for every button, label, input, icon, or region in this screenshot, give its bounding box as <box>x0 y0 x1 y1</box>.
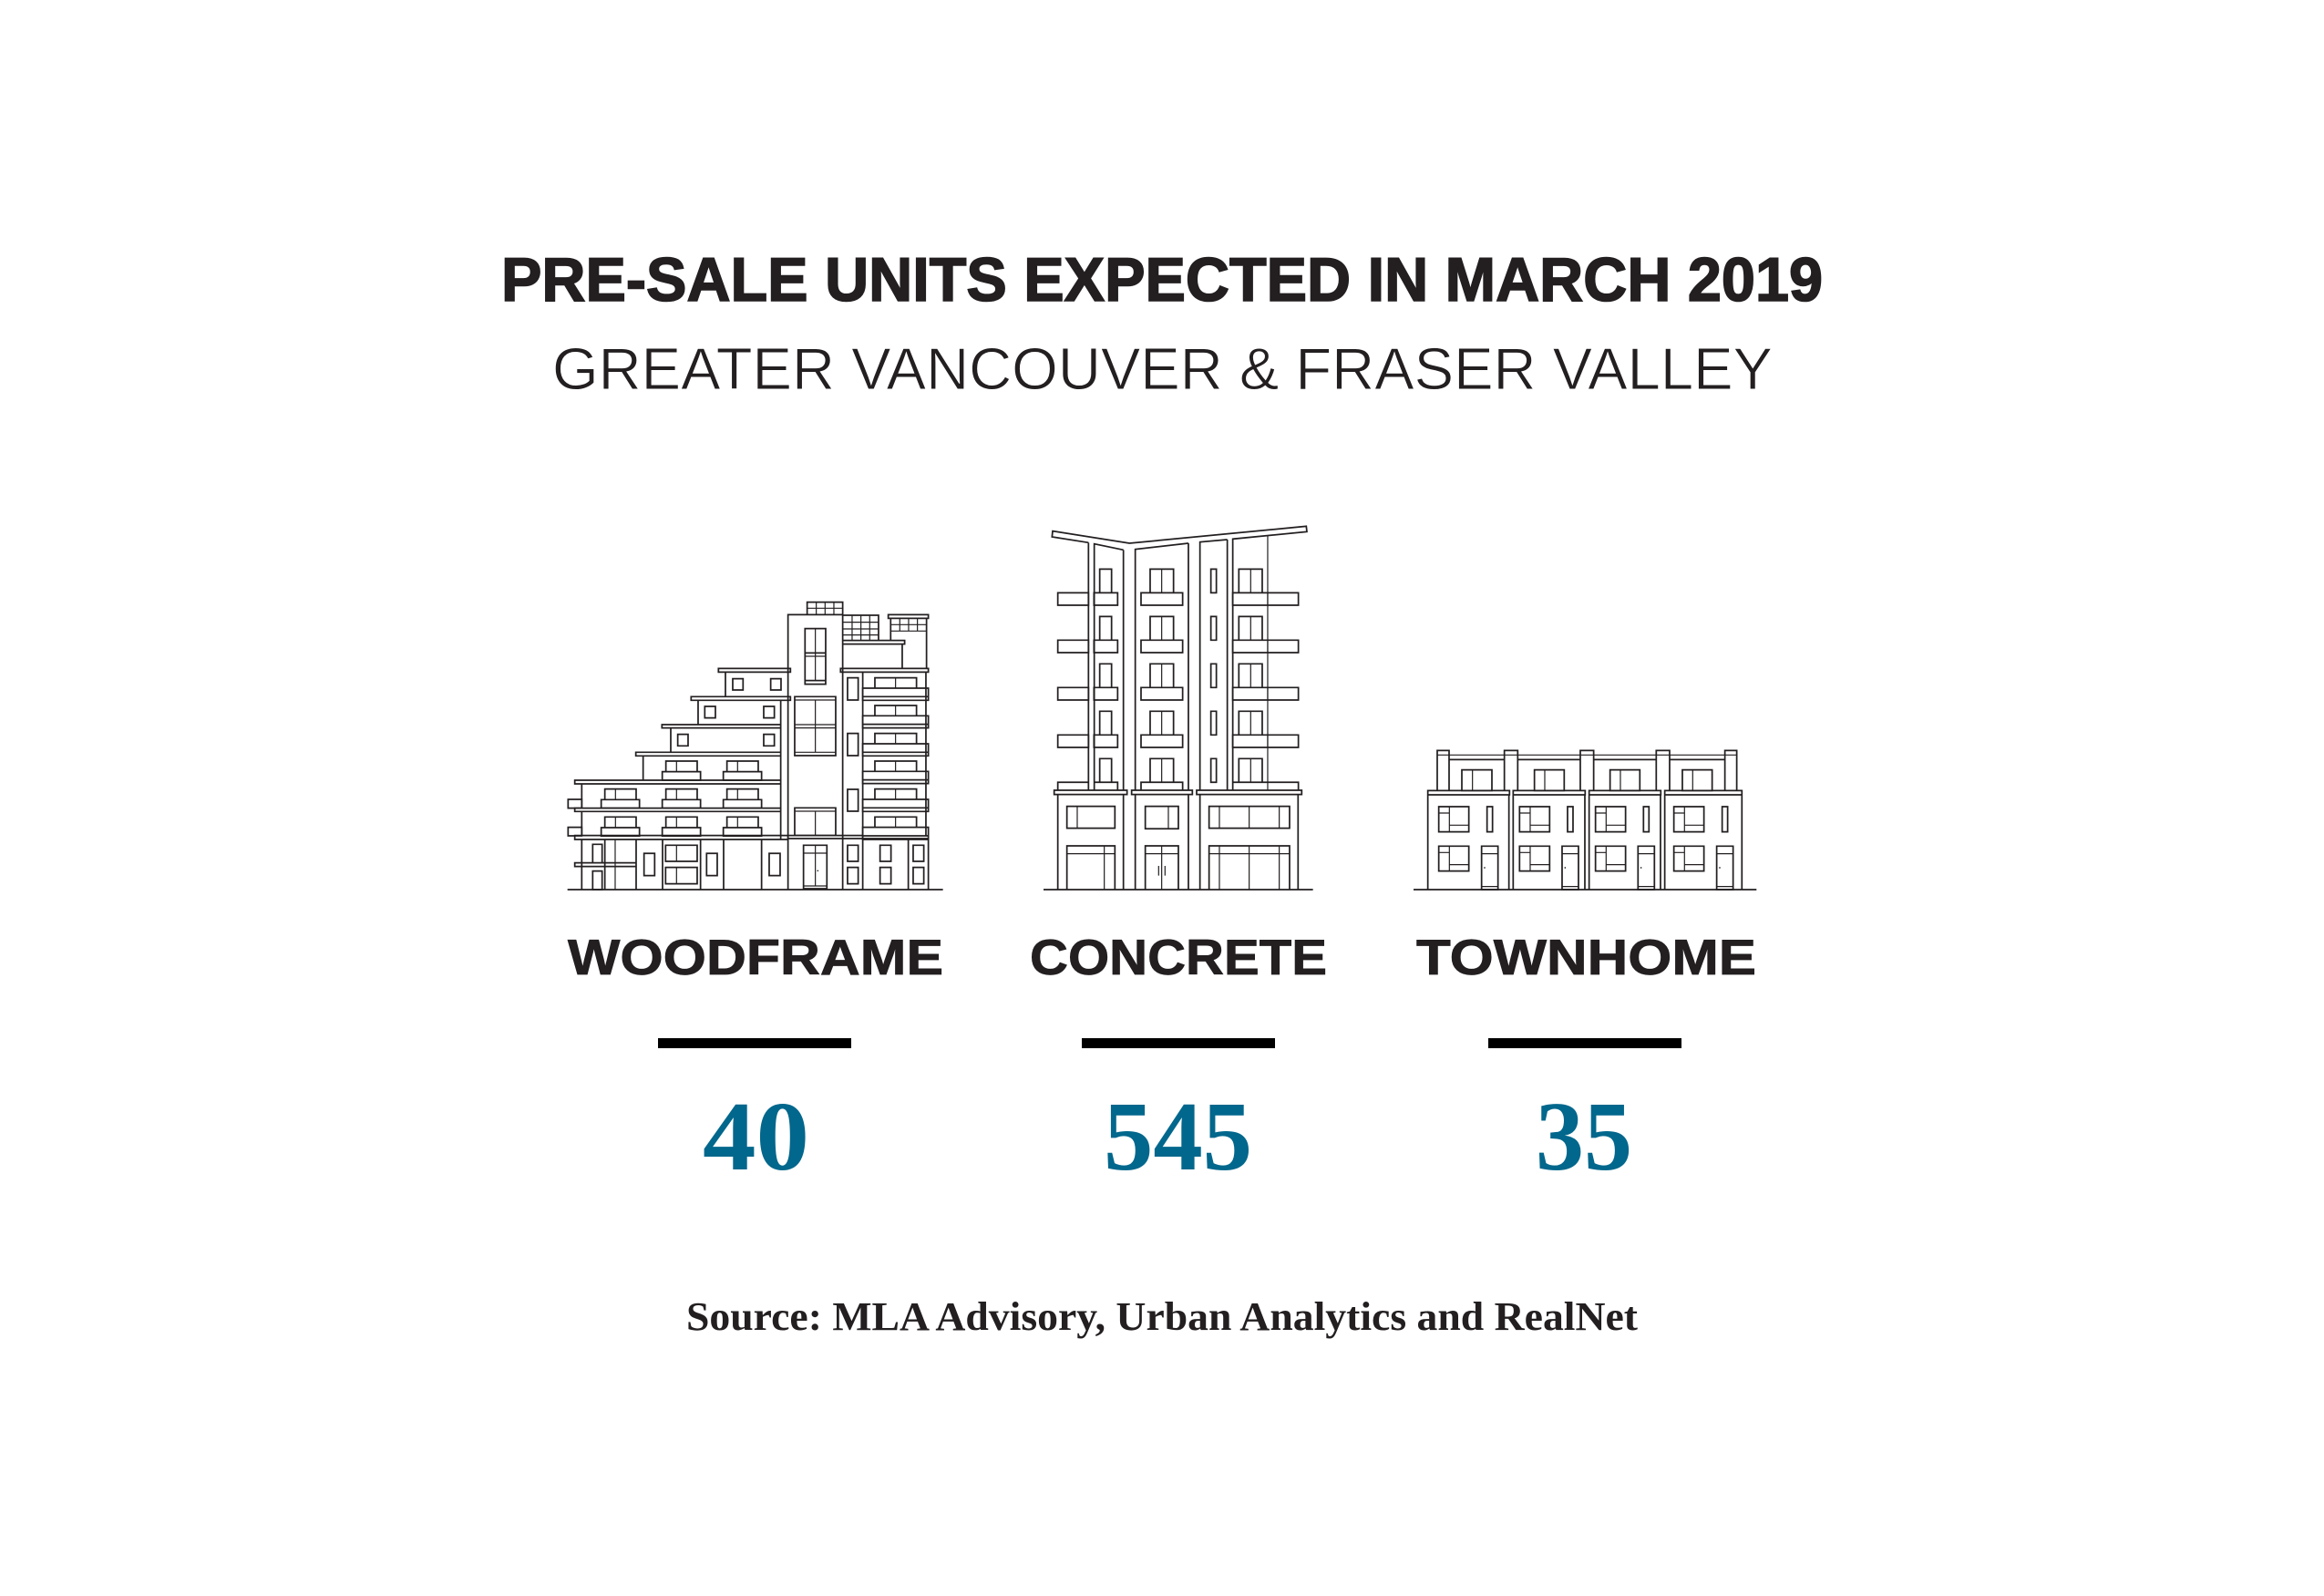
title: PRE-SALE UNITS EXPECTED IN MARCH 2019 <box>501 245 1823 314</box>
icon: woodframe building <box>568 602 943 890</box>
number: townhome units: 35 <box>1536 1083 1632 1191</box>
label: townhome: TOWNHOME <box>1416 929 1756 985</box>
label: woodframe: WOODFRAME <box>568 929 943 985</box>
number: woodframe units: 40 <box>703 1083 809 1191</box>
icon: concrete building <box>1044 526 1313 890</box>
source note: Source: MLA Advisory, Urban Analytics and RealNet <box>686 1294 1638 1339</box>
icon: townhome building <box>1414 750 1756 890</box>
number: concrete units: 545 <box>1104 1083 1252 1191</box>
divider: concrete <box>1082 1038 1275 1048</box>
subtitle: GREATER VANCOUVER & FRASER VALLEY <box>552 335 1773 402</box>
label: concrete: CONCRETE <box>1030 929 1327 985</box>
divider: woodframe <box>658 1038 851 1048</box>
divider: townhome <box>1488 1038 1681 1048</box>
